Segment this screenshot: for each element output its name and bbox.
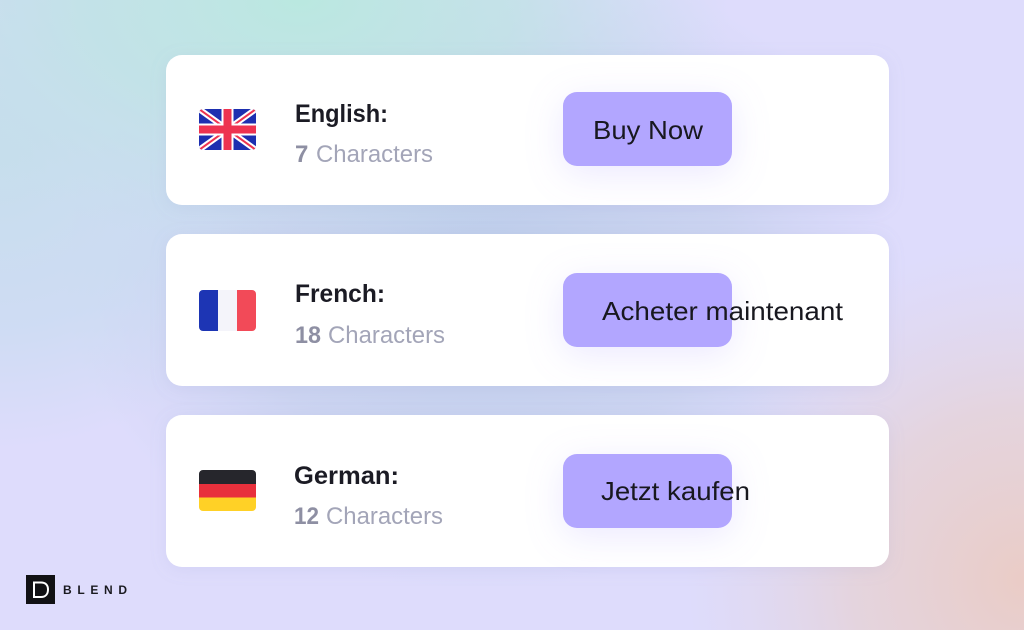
button: Buy Now: Buy Now bbox=[593, 115, 703, 145]
label: English: English: bbox=[295, 100, 388, 128]
label: Characters: Characters bbox=[328, 322, 445, 349]
label: German: German: bbox=[294, 462, 399, 490]
character count: 7: 7 bbox=[295, 141, 308, 168]
label: Characters: Characters bbox=[326, 503, 443, 530]
icon: UK flag bbox=[199, 109, 256, 150]
icon: French flag bbox=[199, 290, 256, 331]
label: Characters: Characters bbox=[316, 141, 433, 168]
icon: logo square bbox=[26, 575, 55, 604]
button: Buy Now bbox=[563, 92, 732, 166]
logo: BLEND bbox=[26, 575, 127, 604]
character count: 18: 18 bbox=[295, 322, 321, 349]
panel: English row bbox=[166, 55, 889, 205]
panel: French row bbox=[166, 234, 889, 386]
button: Acheter maintenant: Acheter maintenant bbox=[602, 296, 844, 326]
icon: German flag bbox=[199, 470, 256, 511]
panel: German row bbox=[166, 415, 889, 567]
character count: 12: 12 bbox=[294, 503, 319, 530]
button: Jetzt kaufen: Jetzt kaufen bbox=[601, 476, 750, 506]
button: Jetzt kaufen bbox=[563, 454, 750, 528]
label: French: French: bbox=[295, 280, 385, 308]
button: Acheter maintenant bbox=[563, 273, 844, 347]
wordmark: BLEND bbox=[63, 583, 127, 597]
